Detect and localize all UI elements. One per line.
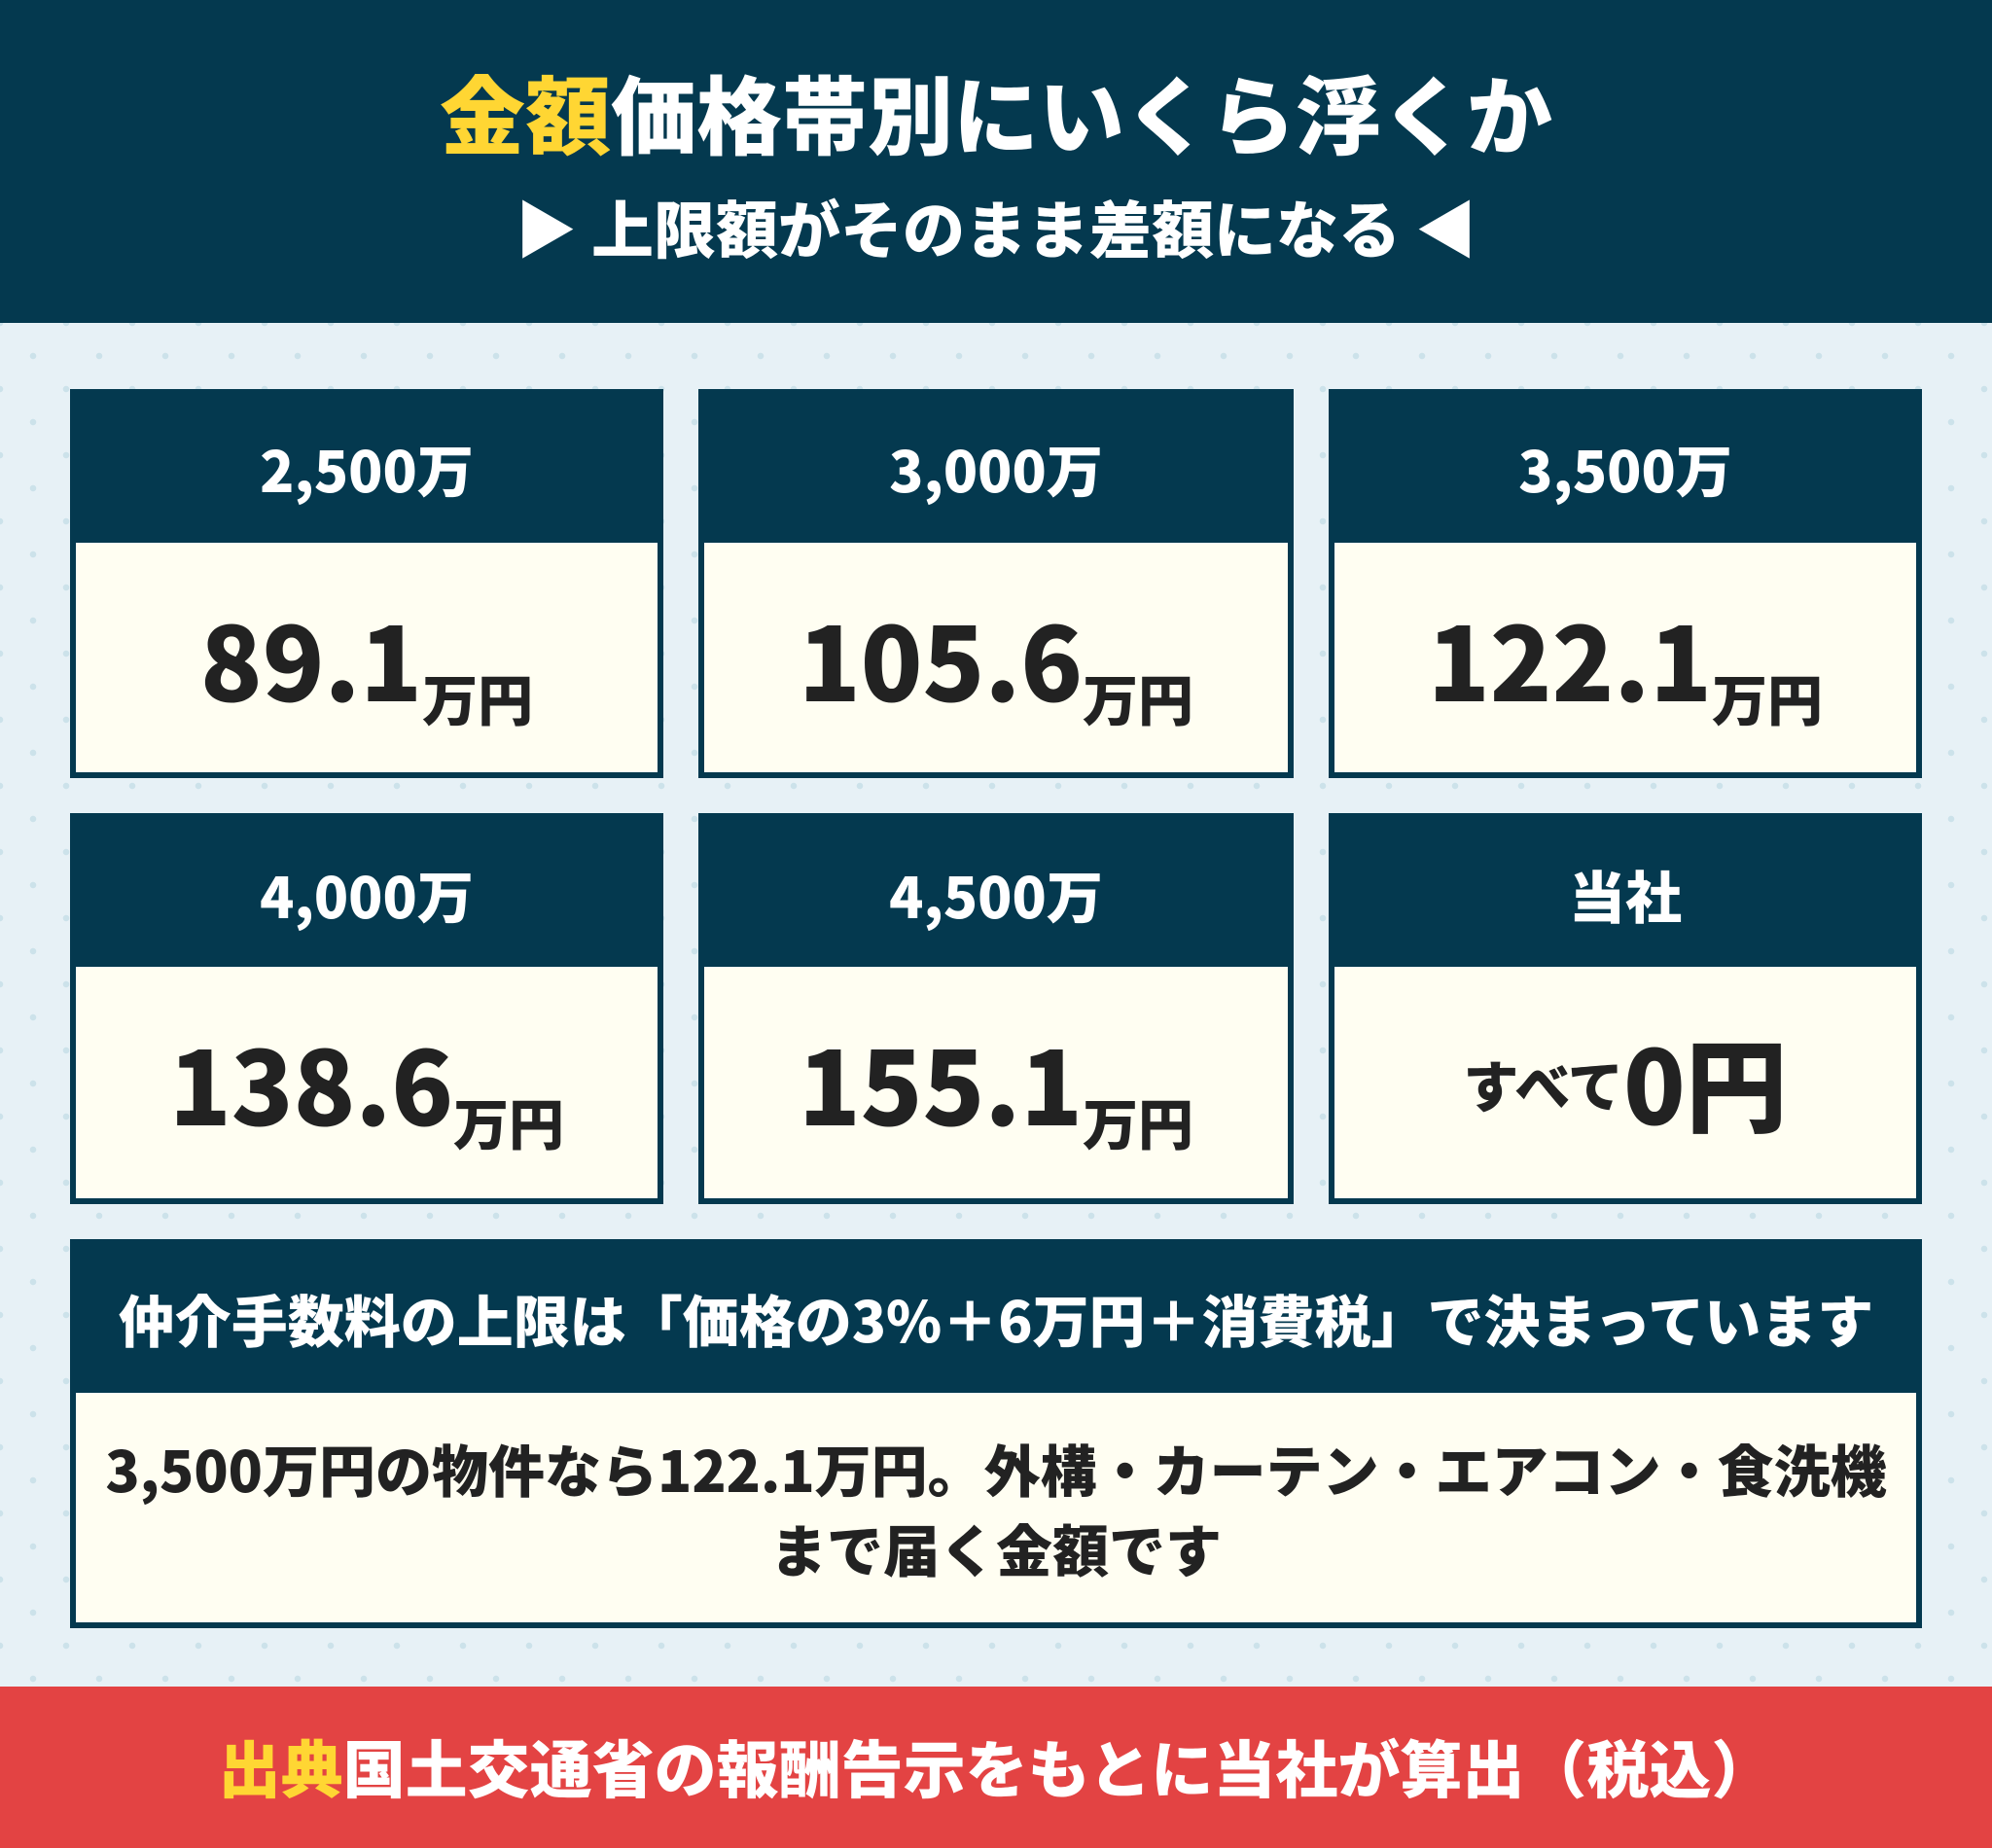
header band bbox=[0, 0, 1992, 323]
value: 89.1万円 bbox=[200, 584, 533, 737]
subtitle: ▶ 上限額がそのまま差額になる ◀ bbox=[515, 182, 1477, 271]
value: 138.6万円 bbox=[169, 1008, 564, 1161]
value panel bbox=[76, 967, 658, 1198]
label: 当社 bbox=[1569, 853, 1682, 935]
body line 2: まで届く金額です bbox=[770, 1507, 1222, 1588]
card: 4,000万 bbox=[70, 813, 663, 1204]
dotted background bbox=[0, 323, 1992, 1687]
value panel bbox=[1334, 967, 1916, 1198]
value panel bbox=[704, 967, 1288, 1198]
title: 金額価格帯別にいくら浮くか bbox=[440, 50, 1552, 173]
panel heading: 仲介手数料の上限は「価格の3%＋6万円＋消費税」で決まっています bbox=[119, 1277, 1873, 1359]
card: 当社 bbox=[1329, 813, 1922, 1204]
panel text bbox=[76, 1393, 1916, 1622]
label: 3,000万 bbox=[889, 427, 1103, 509]
card: 4,500万 bbox=[698, 813, 1294, 1204]
label: 4,500万 bbox=[889, 853, 1103, 935]
panel: fee explanation bbox=[70, 1239, 1922, 1628]
body line 1: 3,500万円の物件なら122.1万円。外構・カーテン・エアコン・食洗機 bbox=[105, 1427, 1887, 1509]
footer band bbox=[0, 1687, 1992, 1848]
card: 3,500万 bbox=[1329, 389, 1922, 778]
card: 3,000万 bbox=[698, 389, 1294, 778]
label: 2,500万 bbox=[260, 427, 474, 509]
value panel bbox=[76, 543, 658, 772]
value: すべて0円 bbox=[1463, 1007, 1788, 1155]
value panel bbox=[704, 543, 1288, 772]
value panel bbox=[1334, 543, 1916, 772]
label: 3,500万 bbox=[1518, 427, 1732, 509]
label: 4,000万 bbox=[260, 853, 474, 935]
card: 2,500万 bbox=[70, 389, 663, 778]
value: 155.1万円 bbox=[799, 1008, 1193, 1161]
value: 122.1万円 bbox=[1428, 584, 1823, 737]
value: 105.6万円 bbox=[799, 584, 1193, 737]
source note: 出典国土交通省の報酬告示をもとに当社が算出（税込） bbox=[219, 1722, 1773, 1811]
